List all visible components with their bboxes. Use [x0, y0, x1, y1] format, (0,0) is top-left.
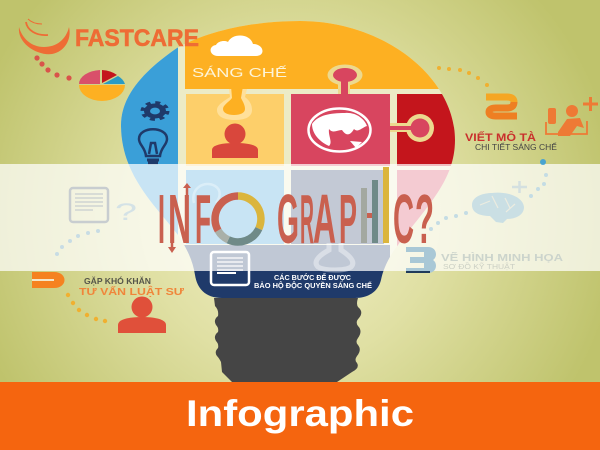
white translucent band — [0, 164, 600, 271]
title: infographic: N — [168, 180, 191, 258]
text: footer caption — [254, 273, 372, 290]
text: footer caption: CÁC BƯỚC ĐỂ ĐƯỢC — [274, 273, 352, 282]
icon: person — [212, 124, 258, 158]
icon: plus faded — [512, 181, 527, 193]
puzzle knob: orange — [217, 86, 252, 120]
icon: pie chart — [79, 70, 125, 101]
icon: faded tablet — [70, 188, 108, 222]
title: infographic — [158, 167, 434, 258]
dotted path: logo to pie — [34, 55, 72, 81]
panel: blue — [121, 48, 178, 235]
puzzle knob: right — [388, 114, 434, 142]
bottom banner — [0, 382, 600, 450]
icon: person lower — [118, 296, 166, 333]
label: sang che: SÁNG CHẾ — [192, 65, 287, 80]
faint puzzle ring: lower slate cell — [316, 243, 353, 270]
title letter I bar — [383, 167, 389, 243]
text: viet mo ta: VIẾT MÔ TÀ — [465, 131, 536, 144]
panel: pink cell — [291, 94, 390, 166]
title: infographic: I — [158, 180, 165, 258]
number 2 — [486, 97, 517, 116]
text: so do ky thuat: SƠ ĐỒ KỸ THUẬT — [443, 261, 516, 271]
icon: question mark faded: ? — [115, 199, 137, 226]
title: infographic: A — [313, 180, 336, 258]
text: ? — [415, 180, 434, 258]
title: infographic: G — [277, 180, 299, 258]
puzzle knob: red top — [328, 64, 362, 95]
panel: navy footer — [180, 245, 390, 300]
light bulb body — [121, 21, 455, 298]
icon: cloud — [211, 35, 262, 56]
icon: globe — [308, 108, 370, 152]
banner label: Infographic — [186, 393, 414, 434]
title: infographic: C — [393, 180, 414, 258]
dotted path: right lower — [540, 159, 546, 165]
faint puzzle ring: lower blue cell — [193, 184, 220, 203]
dotted path: lower left — [66, 293, 107, 323]
icon: brain — [472, 193, 524, 223]
text: chi tiet sang che: CHI TIẾT SÁNG CHẾ — [475, 142, 557, 152]
title letter H bars — [361, 180, 378, 243]
icon: tablet in footer — [211, 252, 249, 285]
title letter O ring — [215, 196, 261, 242]
panel: sang che orange — [185, 21, 439, 89]
number 1 — [32, 272, 64, 288]
panel: light orange cell — [186, 94, 284, 166]
title: infographic: P — [339, 180, 357, 258]
light bulb base — [214, 298, 361, 382]
panel: lower blue cell — [186, 170, 284, 244]
panel: lower slate cell — [291, 170, 384, 244]
logo wordmark: FASTCARE — [75, 25, 199, 52]
number 3 — [406, 247, 436, 273]
dotted path: right upper — [437, 66, 489, 87]
text: ve hinh minh hoa: VẼ HÌNH MINH HỌA — [441, 251, 563, 264]
text: gap kho khan: GẶP KHÓ KHĂN — [84, 275, 151, 286]
text: footer caption: BẢO HỘ ĐỘC QUYỀN SÁNG CHẾ — [254, 280, 372, 290]
title: infographic: F — [195, 180, 211, 258]
panel: dark red cell — [397, 94, 455, 166]
logo: fastcare — [19, 19, 199, 54]
icon: small bulb — [139, 129, 167, 163]
dotted path: left faded — [55, 229, 100, 256]
text: tu van luat su: TƯ VẤN LUẬT SƯ — [79, 285, 185, 298]
panel: lower pink cell — [397, 170, 450, 246]
logo swirl — [19, 19, 70, 54]
title: infographic: R — [300, 180, 314, 258]
icon: gear — [142, 102, 168, 120]
icon: person at desk — [546, 97, 598, 136]
